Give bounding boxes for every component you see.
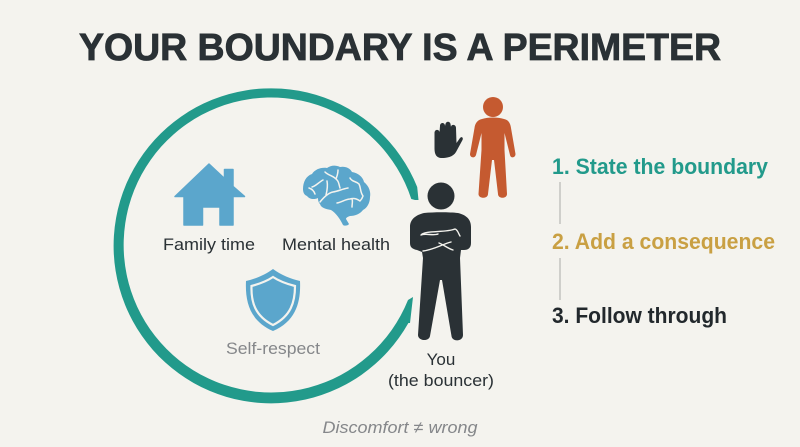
figure: you, arms crossed [410,182,471,340]
title: YOUR BOUNDARY IS A PERIMETER [79,27,721,69]
item: family time [163,164,255,254]
label: mental health: Mental health [282,235,390,254]
icon: brain [303,166,370,226]
connector 2 [559,258,561,300]
label: self-respect: Self-respect [226,339,320,358]
label: you (the bouncer): You [427,350,455,369]
item: mental health [282,166,390,254]
steps list [552,154,775,328]
label: family time: Family time [163,235,255,254]
connector 1 [559,182,561,224]
label: you (the bouncer) [388,350,494,390]
step 1: 1. State the boundary [552,154,769,179]
icon: house [175,164,244,225]
perimeter circle arc [114,88,419,403]
step 2: 2. Add a consequence [552,229,775,254]
label: you (the bouncer): (the bouncer) [388,371,494,390]
icon: shield [246,269,300,331]
item: self-respect [226,269,320,358]
figure: orange person [470,97,516,198]
footer note: Discomfort ≠ wrong [322,418,478,437]
icon: stop hand [434,122,463,158]
step 3: 3. Follow through [552,303,727,328]
